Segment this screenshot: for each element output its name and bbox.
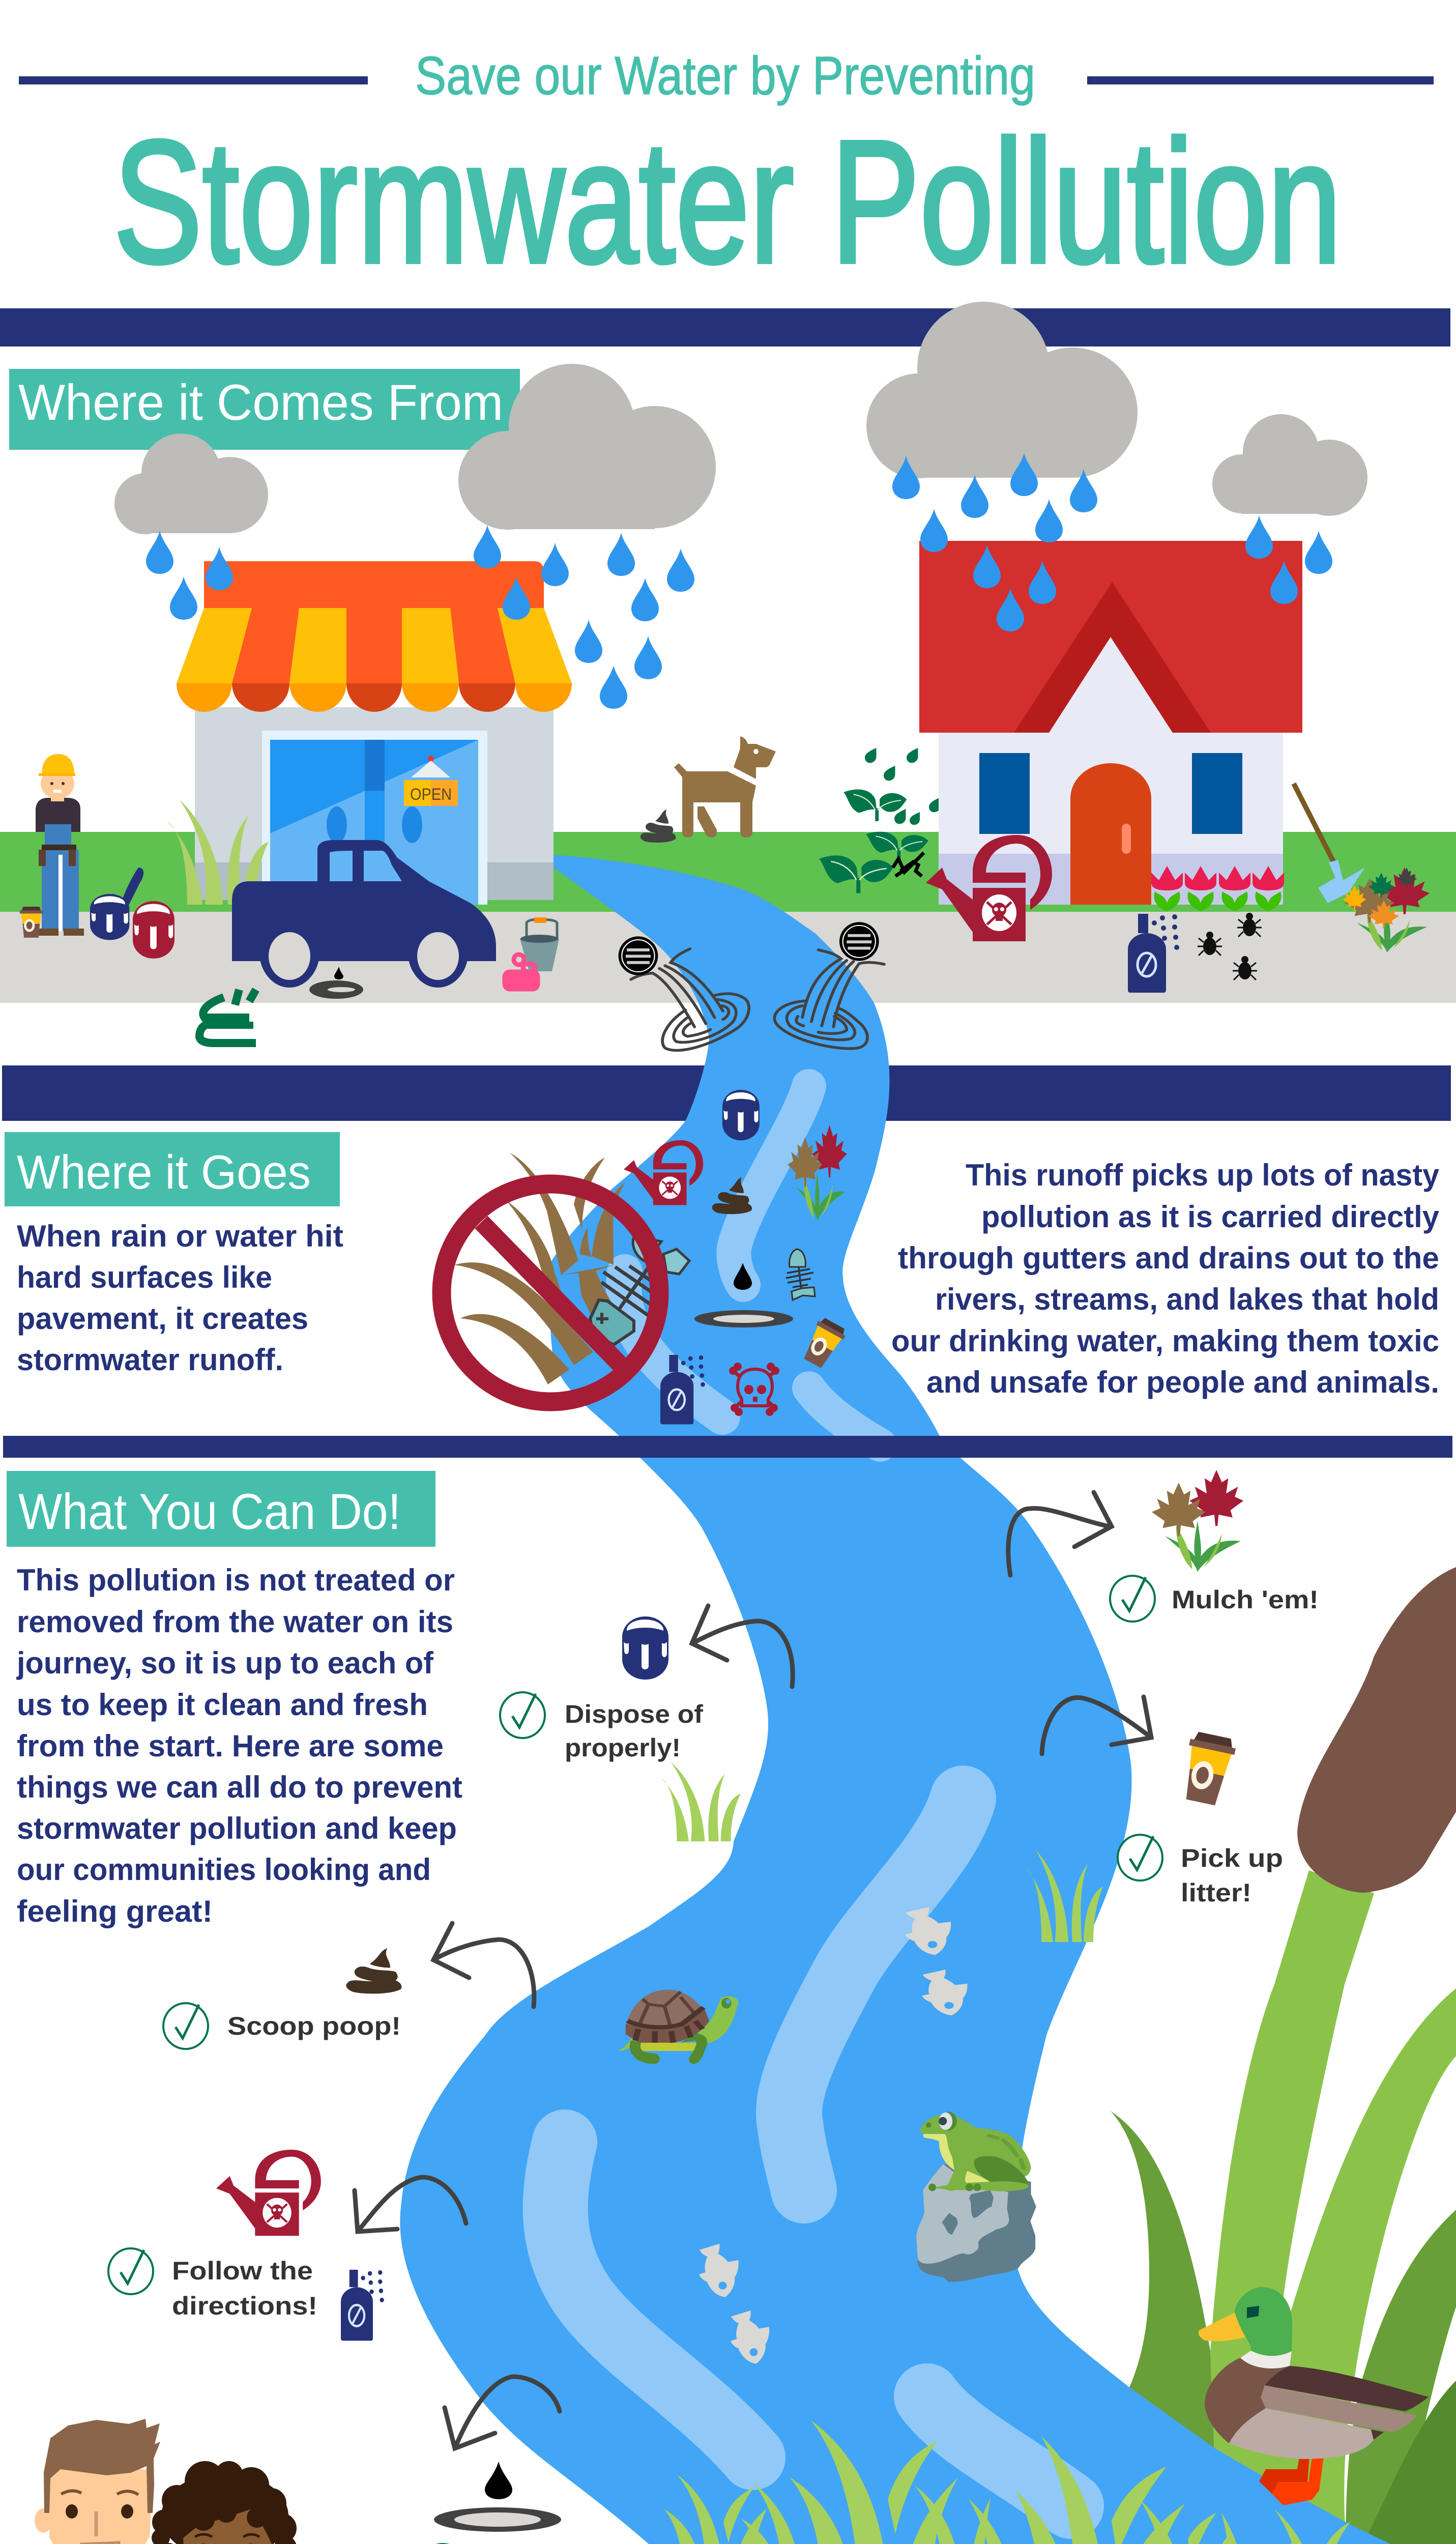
text: what you can do: stormwater pollution and keep xyxy=(17,1811,457,1845)
fish group xyxy=(699,1907,967,2364)
leaves in river xyxy=(788,1125,847,1221)
text: what you can do xyxy=(16,1563,462,1928)
arrow: clean spills xyxy=(445,2377,560,2448)
cloud 4 xyxy=(1212,414,1367,516)
grass tuft in river xyxy=(1026,1850,1103,1942)
foreground grass xyxy=(664,2420,1412,2544)
clouds xyxy=(114,302,1367,534)
paint can: dispose xyxy=(622,1616,668,1680)
open sign: OPEN xyxy=(410,785,452,803)
arrow: mulch xyxy=(1008,1492,1112,1575)
text: where it goes left: stormwater runoff. xyxy=(17,1343,283,1377)
tip: scoop poop xyxy=(163,2003,401,2049)
watering can xyxy=(926,835,1052,941)
frog on rock xyxy=(916,2112,1036,2282)
oil drop and drain xyxy=(309,967,363,999)
text: where it goes right: rivers, streams, and lakes that hold xyxy=(935,1282,1439,1316)
subtitle: Save our Water by Preventing xyxy=(415,46,1035,106)
duck xyxy=(1199,2287,1429,2505)
tulips xyxy=(1151,866,1284,911)
paint can navy xyxy=(90,868,143,940)
garden plants xyxy=(819,748,940,893)
cloud 2 xyxy=(458,364,716,530)
tip: mulch xyxy=(1110,1576,1319,1622)
frog xyxy=(920,2112,1031,2191)
cloud 3 xyxy=(866,302,1138,478)
watering can in river xyxy=(624,1140,703,1205)
street scene background xyxy=(0,832,1456,1003)
lower navy band xyxy=(3,1436,1452,1458)
poop icon xyxy=(346,1948,401,1993)
poop in river xyxy=(712,1177,752,1214)
leaf pile xyxy=(1343,868,1430,952)
house xyxy=(919,541,1302,905)
paint can in river xyxy=(722,1090,760,1140)
text: what you can do: from the start. Here are some xyxy=(17,1729,444,1763)
heading: what you can do: What You Can Do! xyxy=(18,1483,401,1540)
heading: where it comes from xyxy=(9,369,520,450)
tip: scoop poop: Scoop poop! xyxy=(227,2012,401,2040)
spray bottle xyxy=(1128,914,1179,993)
text: what you can do: This pollution is not treated or xyxy=(17,1563,455,1597)
soap xyxy=(505,955,538,989)
watering can: follow directions xyxy=(216,2150,321,2236)
text: where it goes right: pollution as it is carried directly xyxy=(981,1200,1440,1234)
text: what you can do: our communities looking and xyxy=(17,1853,431,1887)
dog xyxy=(674,736,776,837)
tip: follow the directions: Follow the xyxy=(172,2257,313,2285)
arrow: litter xyxy=(1042,1697,1151,1754)
river xyxy=(400,855,1456,2544)
spray bottle: follow directions xyxy=(341,2270,384,2340)
arrow: follow directions xyxy=(355,2177,466,2232)
text: what you can do: removed from the water on its xyxy=(17,1605,453,1639)
soap dish behind sign xyxy=(590,1300,634,1345)
storefront xyxy=(195,707,554,905)
paint can red xyxy=(133,901,174,959)
cattail head xyxy=(1297,1567,1456,1893)
beetles xyxy=(1198,913,1262,980)
text: where it goes right: through gutters and drains out to the xyxy=(898,1241,1439,1275)
leaves: mulch xyxy=(1152,1470,1243,1572)
tip: dispose xyxy=(500,1692,703,1762)
heading: where it goes xyxy=(5,1132,340,1206)
arrow: poop xyxy=(433,1923,534,2007)
rain drops xyxy=(146,453,1332,709)
tip: dispose: Dispose of xyxy=(565,1700,703,1728)
text: where it goes right: our drinking water, making them toxic xyxy=(891,1324,1439,1358)
top navy band xyxy=(0,308,1450,346)
text: what you can do: feeling great! xyxy=(17,1894,213,1928)
spray bottle in river xyxy=(660,1355,705,1424)
dog poop xyxy=(640,810,676,843)
coffee cup: litter xyxy=(1178,1730,1237,1807)
middle navy band xyxy=(2,1065,1451,1121)
tip: mulch: Mulch 'em! xyxy=(1172,1585,1319,1614)
woman xyxy=(152,2461,297,2544)
text: where it goes left: pavement, it creates xyxy=(17,1302,308,1336)
tip: pick up litter xyxy=(1118,1835,1283,1907)
text: where it goes left: hard surfaces like xyxy=(17,1260,272,1294)
tip: pick up litter: Pick up xyxy=(1181,1844,1283,1872)
text: where it goes right xyxy=(891,1158,1440,1399)
oil drop and drain: clean spills xyxy=(434,2462,561,2532)
drain in river xyxy=(694,1310,793,1327)
text: where it goes right: and unsafe for people and animals. xyxy=(926,1365,1439,1399)
text: what you can do: us to keep it clean and fresh xyxy=(17,1688,428,1722)
coffee cup in river xyxy=(799,1316,848,1371)
rock xyxy=(916,2164,1036,2282)
tip: follow the directions xyxy=(108,2248,317,2320)
heading: where it comes from: Where it Comes From xyxy=(18,374,503,430)
text: where it goes right: This runoff picks up lots of nasty xyxy=(966,1158,1440,1192)
garden hose xyxy=(199,990,256,1043)
worker xyxy=(36,754,84,936)
river pollutants xyxy=(624,1090,848,1424)
litter behind sign xyxy=(601,1236,689,1316)
man xyxy=(27,2419,171,2544)
rake xyxy=(1294,784,1365,903)
open sign xyxy=(404,756,458,806)
fish skeleton xyxy=(786,1249,815,1300)
litter: coffee cup xyxy=(20,907,43,938)
text: where it goes left xyxy=(17,1219,343,1377)
car xyxy=(232,840,496,988)
text: what you can do: things we can all do to prevent xyxy=(17,1770,462,1804)
no-littering sign xyxy=(442,1153,689,1402)
grass tuft at shop xyxy=(167,800,269,905)
skull and crossbones xyxy=(729,1363,779,1416)
cloud 1 xyxy=(114,433,268,534)
oil drop in river xyxy=(734,1263,752,1290)
arrow: dispose xyxy=(692,1606,793,1687)
storm drain right xyxy=(774,922,884,1049)
heading: where it goes: Where it Goes xyxy=(17,1145,311,1199)
bucket xyxy=(520,917,559,971)
storm drain left xyxy=(619,936,749,1050)
storm drains xyxy=(619,922,884,1050)
tip: follow the directions: directions! xyxy=(172,2292,317,2320)
tip: pick up litter: litter! xyxy=(1181,1878,1251,1907)
tip: dispose: properly! xyxy=(565,1733,681,1762)
header rule right xyxy=(1087,76,1434,84)
text: what you can do: journey, so it is up to each of xyxy=(16,1646,434,1680)
awning xyxy=(177,561,572,712)
grass tuft by river xyxy=(661,1762,741,1841)
turtle xyxy=(618,1990,738,2064)
text: where it goes left: When rain or water hit xyxy=(17,1219,343,1253)
header rule left xyxy=(19,76,368,84)
cattail stem and reeds xyxy=(1111,1870,1456,2544)
